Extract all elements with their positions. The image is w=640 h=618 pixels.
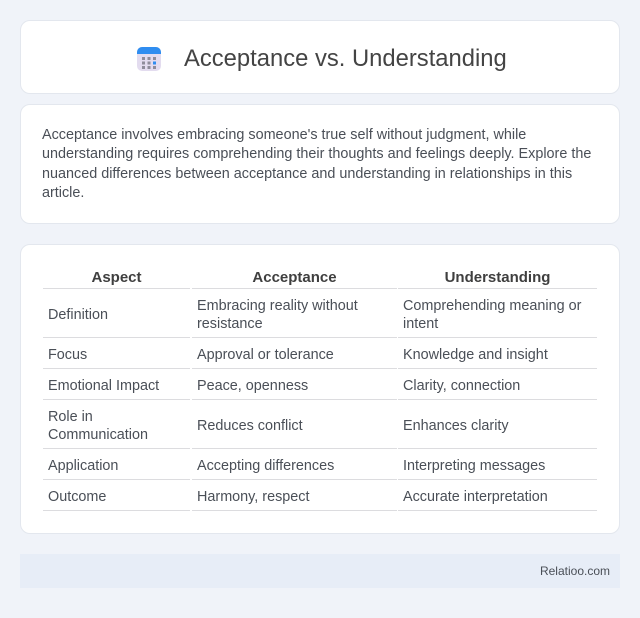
row: definition: Comprehending meaning or	[403, 298, 581, 314]
row: role in communication: Enhances clarity	[403, 418, 509, 434]
row: focus: Focus	[48, 347, 87, 363]
intro text: article.	[42, 185, 84, 201]
row: definition: Embracing reality without	[197, 298, 358, 314]
panel: title card	[20, 20, 620, 94]
title: Acceptance vs. Understanding	[184, 45, 507, 72]
intro text	[42, 127, 591, 201]
footer credit: Relatioo.com	[540, 564, 610, 578]
row: application: Interpreting messages	[403, 458, 545, 474]
row: role in communication: Reduces conflict	[197, 418, 303, 434]
column headers	[91, 269, 550, 286]
row: emotional impact: Emotional Impact	[48, 378, 159, 394]
row: outcome	[48, 489, 548, 505]
row: role in communication: Role in	[48, 409, 93, 425]
row: focus: Approval or tolerance	[197, 347, 334, 363]
intro text: understanding requires comprehending their thoughts and feelings deeply. Explore the	[42, 146, 591, 162]
intro text: Acceptance involves embracing someone's true self without judgment, while	[42, 127, 526, 143]
icon: calendar	[137, 47, 161, 71]
row: application	[48, 458, 545, 474]
row: focus: Knowledge and insight	[403, 347, 548, 363]
row: emotional impact: Clarity, connection	[403, 378, 520, 394]
row: application: Accepting differences	[197, 458, 334, 474]
column headers: Understanding	[445, 269, 550, 286]
intro text: nuanced differences between acceptance and understanding in relationships in this	[42, 166, 572, 182]
row: outcome: Accurate interpretation	[403, 489, 548, 505]
column headers: Acceptance	[252, 269, 337, 286]
row: definition: Definition	[48, 307, 108, 323]
footer bar	[20, 554, 620, 588]
row: definition: resistance	[197, 316, 263, 332]
panel: introduction	[20, 104, 620, 224]
row: role in communication	[48, 409, 509, 443]
row: outcome: Outcome	[48, 489, 106, 505]
row: emotional impact	[48, 378, 520, 394]
row: definition: intent	[403, 316, 438, 332]
row: application: Application	[48, 458, 118, 474]
row: outcome: Harmony, respect	[197, 489, 310, 505]
comparison table	[43, 269, 597, 511]
row: definition	[48, 298, 582, 332]
column headers: Aspect	[91, 269, 142, 286]
row: focus	[48, 347, 548, 363]
panel: comparison table	[20, 244, 620, 534]
row: emotional impact: Peace, openness	[197, 378, 308, 394]
row: role in communication: Communication	[48, 427, 148, 443]
